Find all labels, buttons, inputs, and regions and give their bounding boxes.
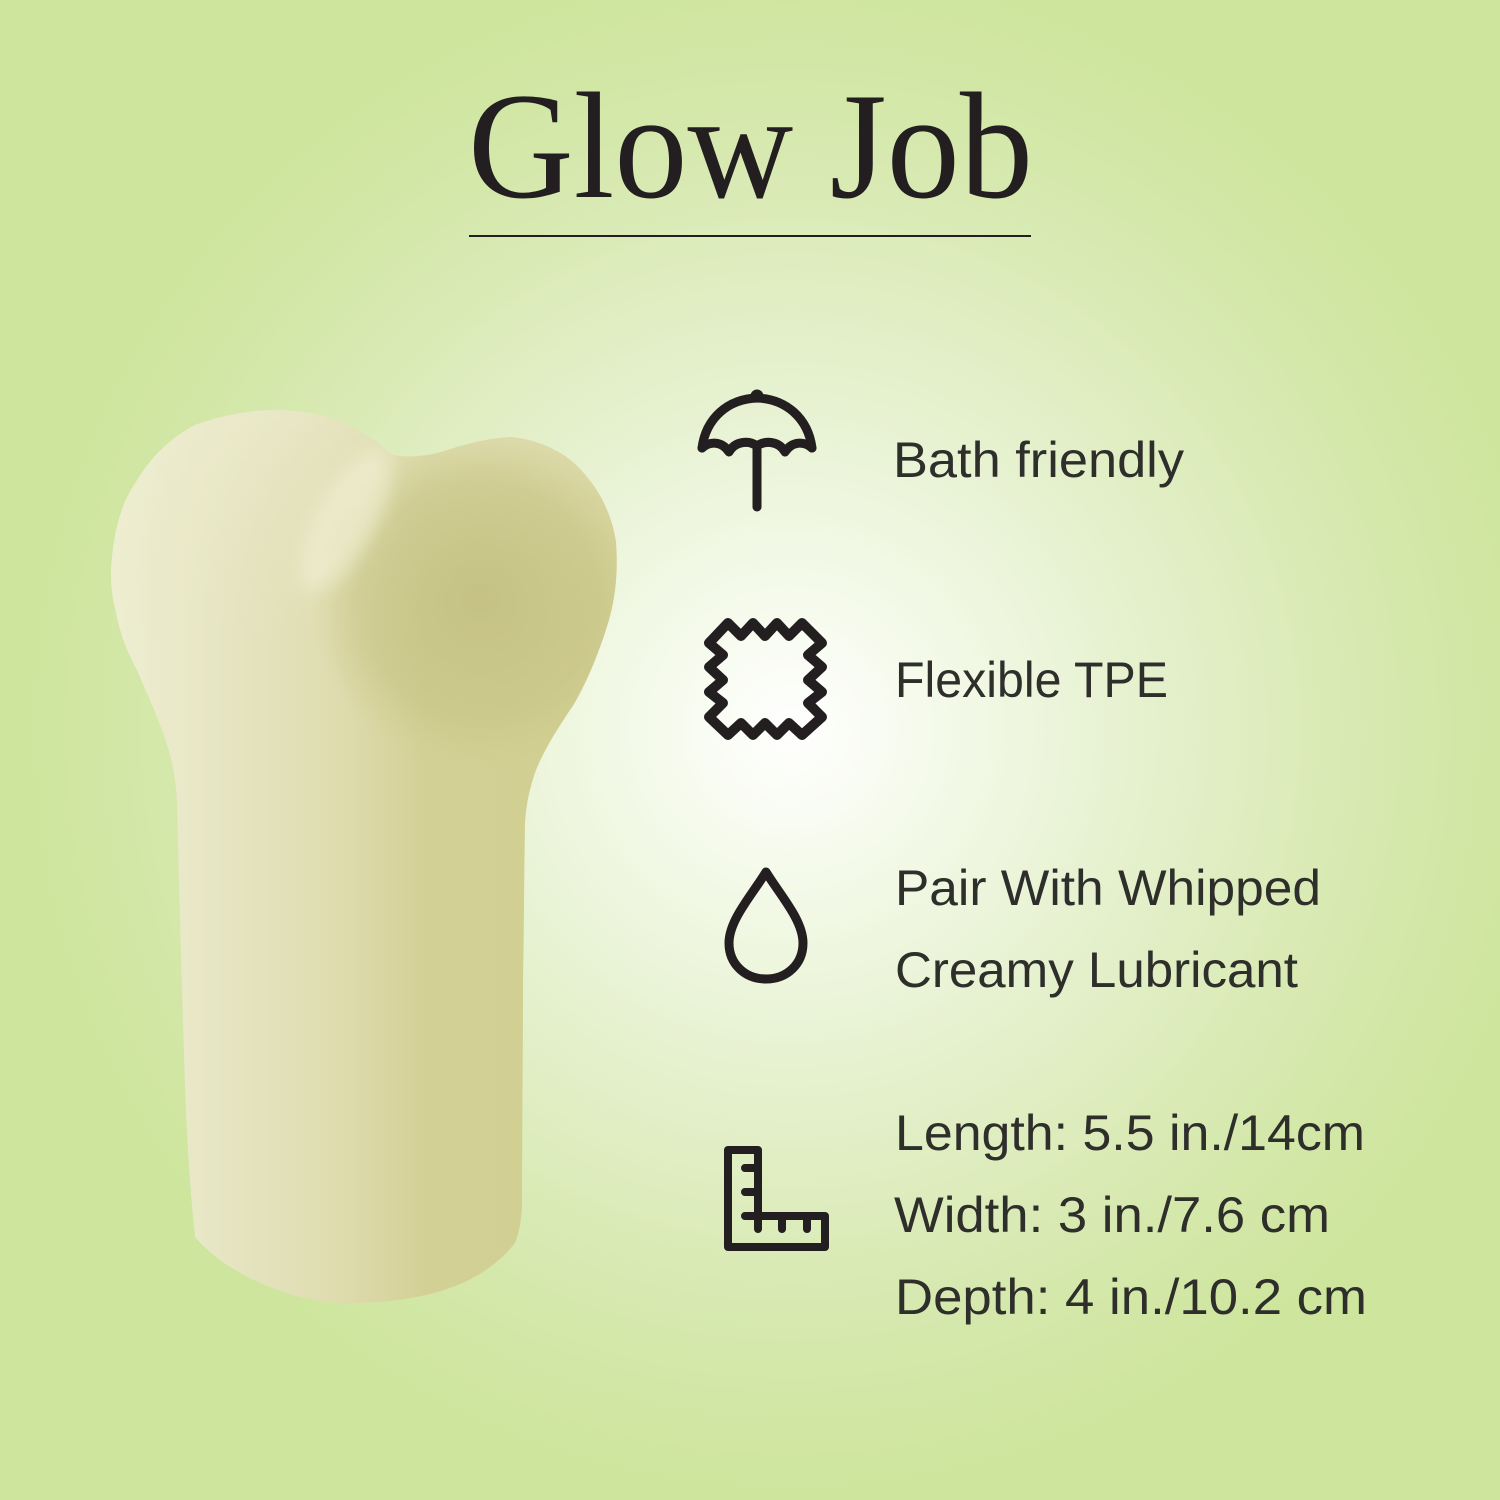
product silhouette [100,400,650,1310]
title: Glow Job [468,62,1033,230]
icon: umbrella [702,394,812,507]
label: lubricant pairing: Pair With Whipped [895,860,1321,916]
icon: ruler [728,1150,825,1247]
icon: flexible material swatch [709,623,822,735]
label: bath friendly: Bath friendly [893,432,1184,488]
icon: droplet [729,872,803,979]
label: dimensions: Width: 3 in./7.6 cm [894,1187,1330,1243]
label: flexible TPE: Flexible TPE [895,652,1168,708]
label: dimensions [894,1105,1367,1325]
label: lubricant pairing: Creamy Lubricant [895,942,1298,998]
label: dimensions: Length: 5.5 in./14cm [895,1105,1365,1161]
label: dimensions: Depth: 4 in./10.2 cm [895,1269,1367,1325]
label: lubricant pairing [895,860,1321,998]
